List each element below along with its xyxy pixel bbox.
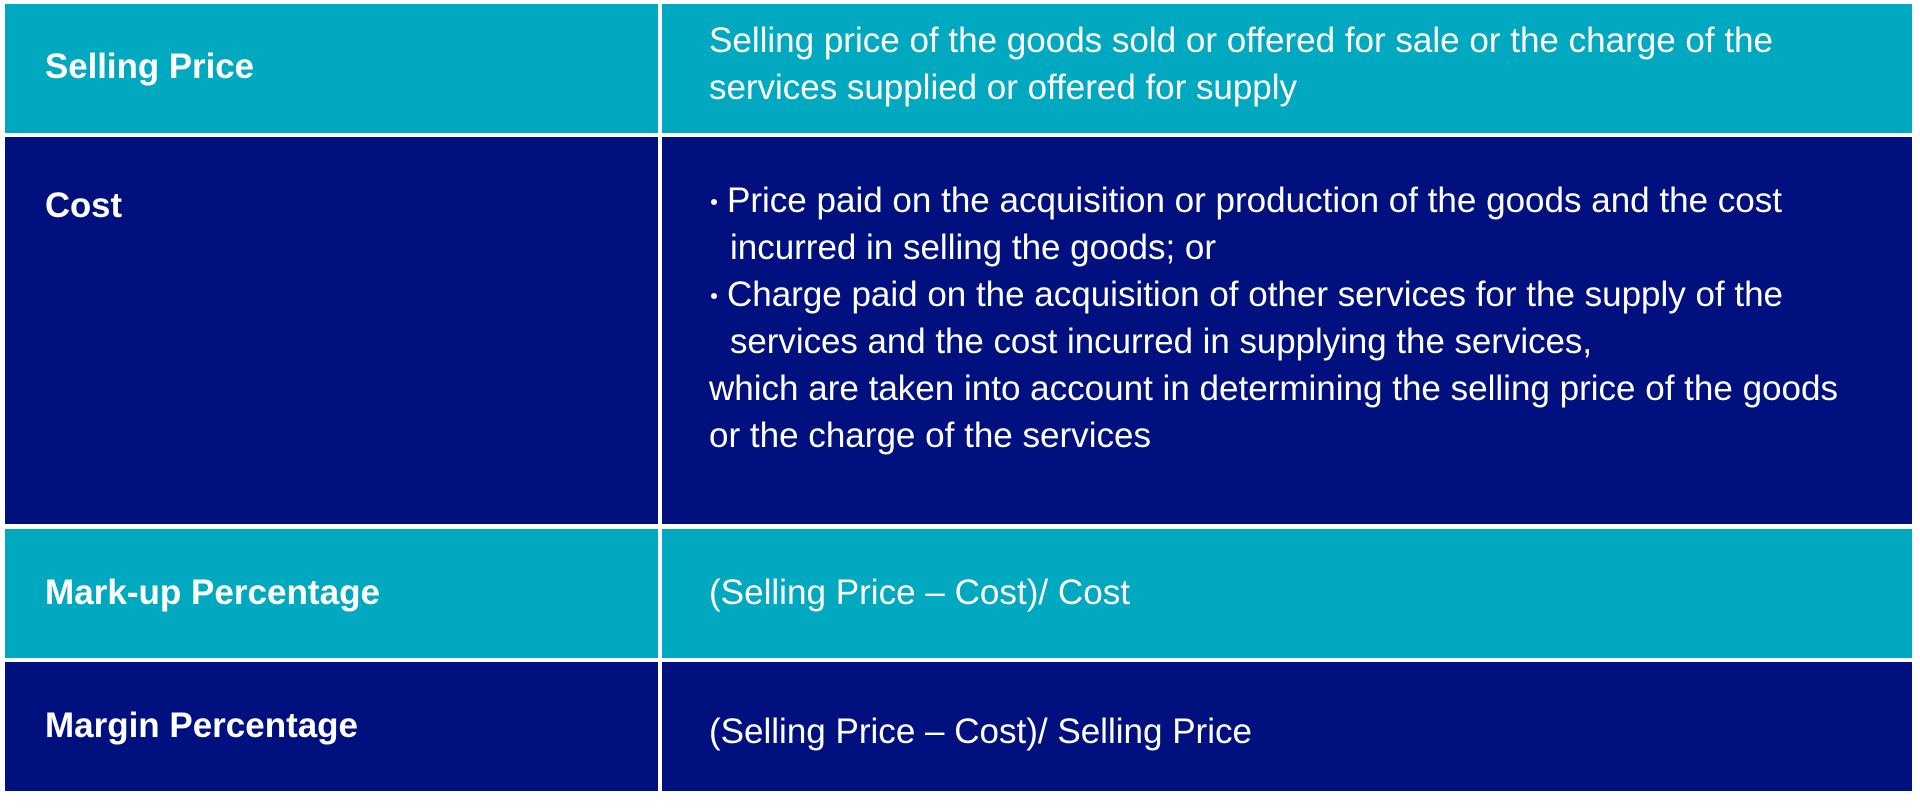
row: selling price	[5, 4, 1912, 133]
label cell: cost	[5, 137, 658, 524]
row: mark-up percentage	[5, 529, 1912, 658]
label cell: selling price: Selling Price	[45, 47, 254, 86]
closing text: or the charge of the services	[709, 416, 1151, 455]
label cell: mark-up percentage: Mark-up Percentage	[45, 573, 380, 612]
bullet: price paid: incurred in selling the goods; or	[730, 228, 1216, 267]
row: margin percentage	[5, 662, 1912, 791]
label cell: mark-up percentage	[5, 529, 658, 658]
definition cell: selling price	[662, 4, 1912, 133]
label cell: margin percentage: Margin Percentage	[45, 706, 358, 745]
definition cell: margin formula	[662, 662, 1912, 791]
bullet: charge paid: Charge paid on the acquisition of other services for the supply of the	[727, 275, 1783, 314]
definition cell: mark-up formula	[662, 529, 1912, 658]
bullet: price paid	[711, 181, 1782, 267]
definition cell: cost	[662, 137, 1912, 524]
bullet: price paid: Price paid on the acquisition or production of the goods and the cost	[727, 181, 1782, 220]
label cell: cost: Cost	[45, 186, 122, 225]
definition cell: mark-up formula: (Selling Price – Cost)/ Cost	[709, 573, 1130, 612]
bullet: charge paid	[711, 275, 1783, 361]
row: cost	[5, 137, 1912, 524]
definition cell: selling price: Selling price of the goods sold or offered for sale or the charge of the	[709, 21, 1773, 60]
definition cell: margin formula: (Selling Price – Cost)/ Selling Price	[709, 712, 1252, 751]
label cell: margin percentage	[5, 662, 658, 791]
bullet: charge paid: services and the cost incurred in supplying the services,	[730, 322, 1592, 361]
label cell: selling price	[5, 4, 658, 133]
definition cell: selling price: services supplied or offered for supply	[709, 68, 1297, 107]
closing text	[708, 369, 1838, 455]
closing text: which are taken into account in determining the selling price of the goods	[708, 369, 1838, 408]
